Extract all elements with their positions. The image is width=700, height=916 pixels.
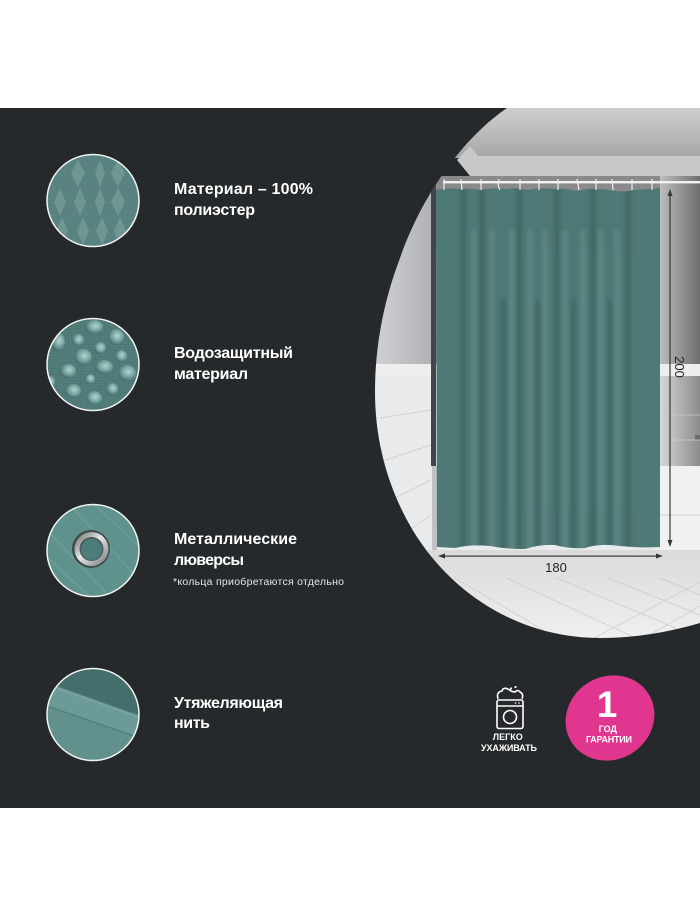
text: weighted thread: Утяжеляющая bbox=[174, 695, 283, 712]
dark background panel bbox=[0, 108, 700, 808]
dark curtain edge bbox=[431, 176, 436, 466]
icon: washing machine bbox=[497, 686, 523, 728]
floor bbox=[426, 550, 700, 638]
note: rings sold separately: *кольца приобретаются отдельно bbox=[173, 576, 344, 588]
panel: bathroom photo bbox=[370, 108, 700, 640]
left wall bbox=[376, 186, 435, 366]
feature: weighted thread bbox=[47, 668, 287, 761]
dado rail bbox=[370, 364, 700, 376]
ceiling bbox=[454, 108, 700, 158]
circle outline bbox=[47, 668, 139, 760]
text: material: Материал – 100% bbox=[174, 181, 313, 198]
text: weighted thread: нить bbox=[174, 715, 210, 732]
curtain shadow folds bbox=[463, 185, 628, 550]
feature: waterproof bbox=[45, 318, 297, 411]
text: grommets: люверсы bbox=[174, 552, 244, 569]
arrow: width bbox=[438, 554, 663, 558]
crown moulding bbox=[457, 146, 700, 176]
label: easy care: ЛЕГКО bbox=[493, 732, 523, 742]
warranty label: ГОД bbox=[599, 724, 617, 734]
warranty number: 1 bbox=[597, 684, 617, 725]
icon: fabric texture bbox=[47, 154, 139, 247]
curtain weave bbox=[436, 185, 660, 550]
lower wall bbox=[375, 376, 660, 556]
icon: metal grommet bbox=[47, 504, 140, 597]
circle outline bbox=[47, 318, 139, 410]
arrow: height bbox=[668, 189, 672, 547]
curtain fabric bbox=[436, 185, 660, 550]
badge: one year warranty bbox=[549, 659, 671, 777]
label: width 180: 180 bbox=[545, 560, 567, 575]
tile lines bbox=[380, 410, 700, 640]
feature: grommets bbox=[47, 504, 344, 597]
icon: hem band bbox=[47, 668, 140, 761]
label: height 200: 200 bbox=[672, 356, 687, 378]
pink blob bbox=[549, 659, 671, 777]
text: grommets: Металлические bbox=[174, 531, 297, 548]
curtain frame bbox=[432, 466, 437, 550]
text: waterproof: материал bbox=[174, 366, 248, 383]
curtain highlight folds bbox=[474, 230, 617, 550]
curtain bbox=[436, 185, 660, 550]
back wall strip bbox=[431, 176, 660, 364]
feature: material bbox=[47, 154, 318, 247]
text: material: полиэстер bbox=[174, 202, 255, 219]
label: easy care: УХАЖИВАТЬ bbox=[481, 743, 538, 753]
curtain rod bbox=[443, 181, 700, 183]
right wall bbox=[660, 176, 700, 366]
tap bbox=[695, 435, 700, 440]
curtain hooks bbox=[444, 179, 652, 190]
warranty label: ГАРАНТИИ bbox=[586, 734, 632, 744]
right tiled wall bbox=[660, 376, 700, 466]
icon: water drops bbox=[45, 318, 139, 411]
circle outline bbox=[47, 154, 139, 246]
bathtub bbox=[660, 466, 700, 550]
text: waterproof: Водозащитный bbox=[174, 345, 293, 362]
circle outline bbox=[47, 504, 139, 596]
